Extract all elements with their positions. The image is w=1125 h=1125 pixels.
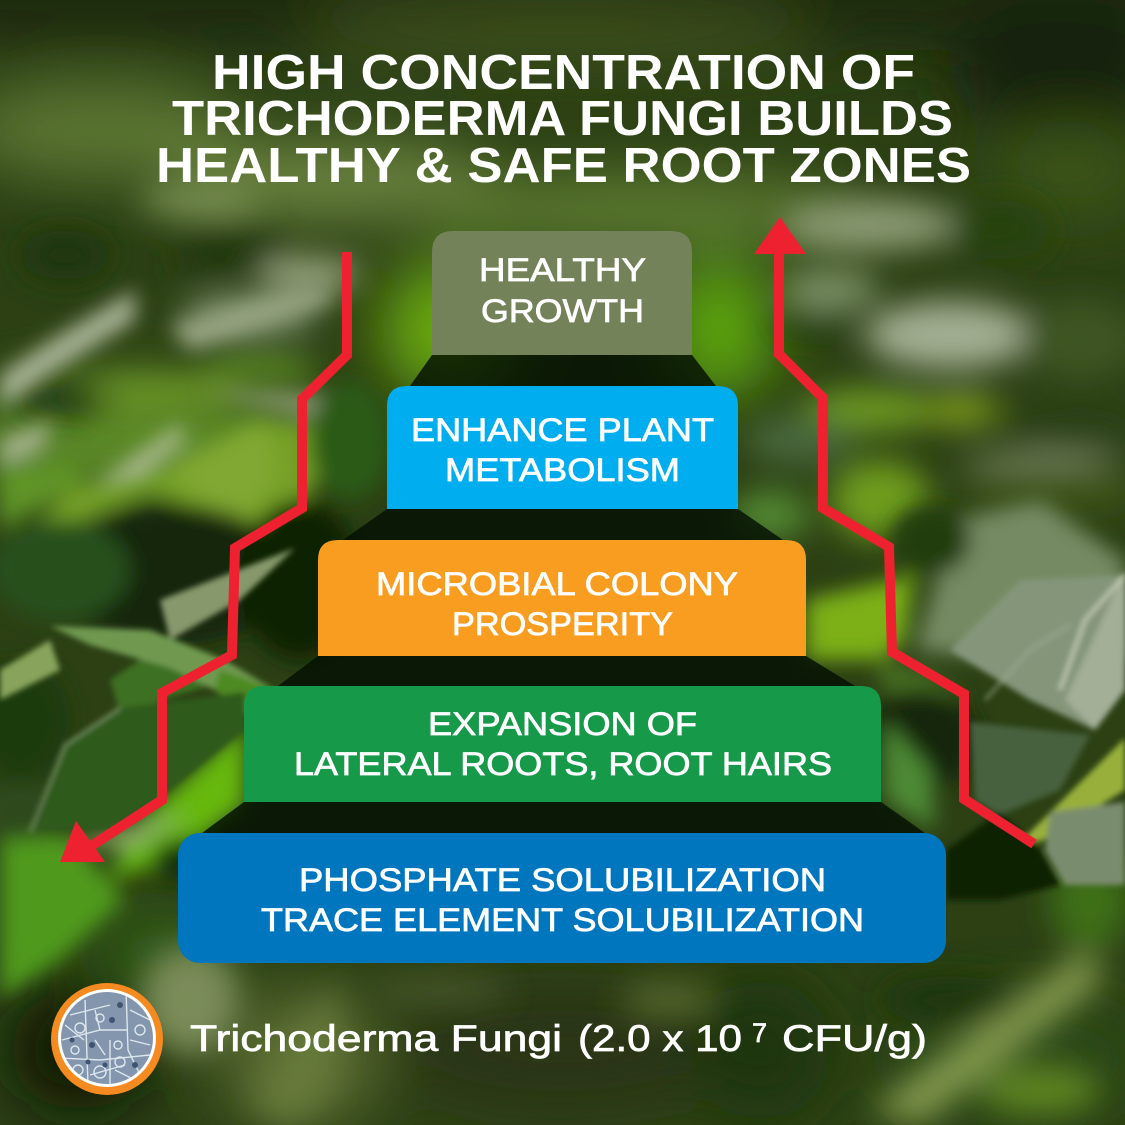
pyramid level 3: microbial colony prosperity xyxy=(318,540,806,656)
title: HEALTHY & SAFE ROOT ZONES xyxy=(156,139,971,193)
arrow: upward right red path xyxy=(754,217,1034,844)
pyramid level 3: microbial colony prosperity: MICROBIAL COLONY xyxy=(376,566,738,602)
title: TRICHODERMA FUNGI BUILDS xyxy=(172,92,953,146)
pyramid level 2: enhance plant metabolism: ENHANCE PLANT xyxy=(411,412,714,448)
caption: trichoderma concentration xyxy=(190,1018,927,1059)
caption: trichoderma concentration: 7 xyxy=(752,1018,767,1048)
pyramid level 5: solubilization xyxy=(178,833,946,963)
title xyxy=(156,46,971,193)
title: HIGH CONCENTRATION OF xyxy=(212,46,915,100)
caption: trichoderma concentration: (2.0 x 10 xyxy=(578,1018,742,1059)
caption: trichoderma concentration: Trichoderma Fungi xyxy=(190,1018,562,1059)
pyramid level 1: healthy growth xyxy=(432,231,692,355)
caption: trichoderma concentration: CFU/g) xyxy=(782,1018,927,1059)
pyramid level 2: enhance plant metabolism: METABOLISM xyxy=(445,452,680,488)
pyramid level 4: lateral roots expansion: EXPANSION OF xyxy=(428,706,697,742)
arrow: downward left red path xyxy=(60,252,347,862)
pyramid level 4: lateral roots expansion xyxy=(244,686,881,802)
icon: trichoderma microscope badge xyxy=(51,983,163,1095)
pyramid level 2: enhance plant metabolism xyxy=(387,386,738,509)
pyramid connector shading xyxy=(202,355,925,833)
pyramid level 5: solubilization: TRACE ELEMENT SOLUBILIZATION xyxy=(261,902,864,938)
pyramid level 1: healthy growth: GROWTH xyxy=(481,293,644,329)
pyramid level 4: lateral roots expansion: LATERAL ROOTS, ROOT HAIRS xyxy=(294,746,832,782)
pyramid level 3: microbial colony prosperity: PROSPERITY xyxy=(452,606,673,642)
pyramid level 5: solubilization: PHOSPHATE SOLUBILIZATION xyxy=(299,862,826,898)
pyramid level 1: healthy growth: HEALTHY xyxy=(479,252,646,288)
